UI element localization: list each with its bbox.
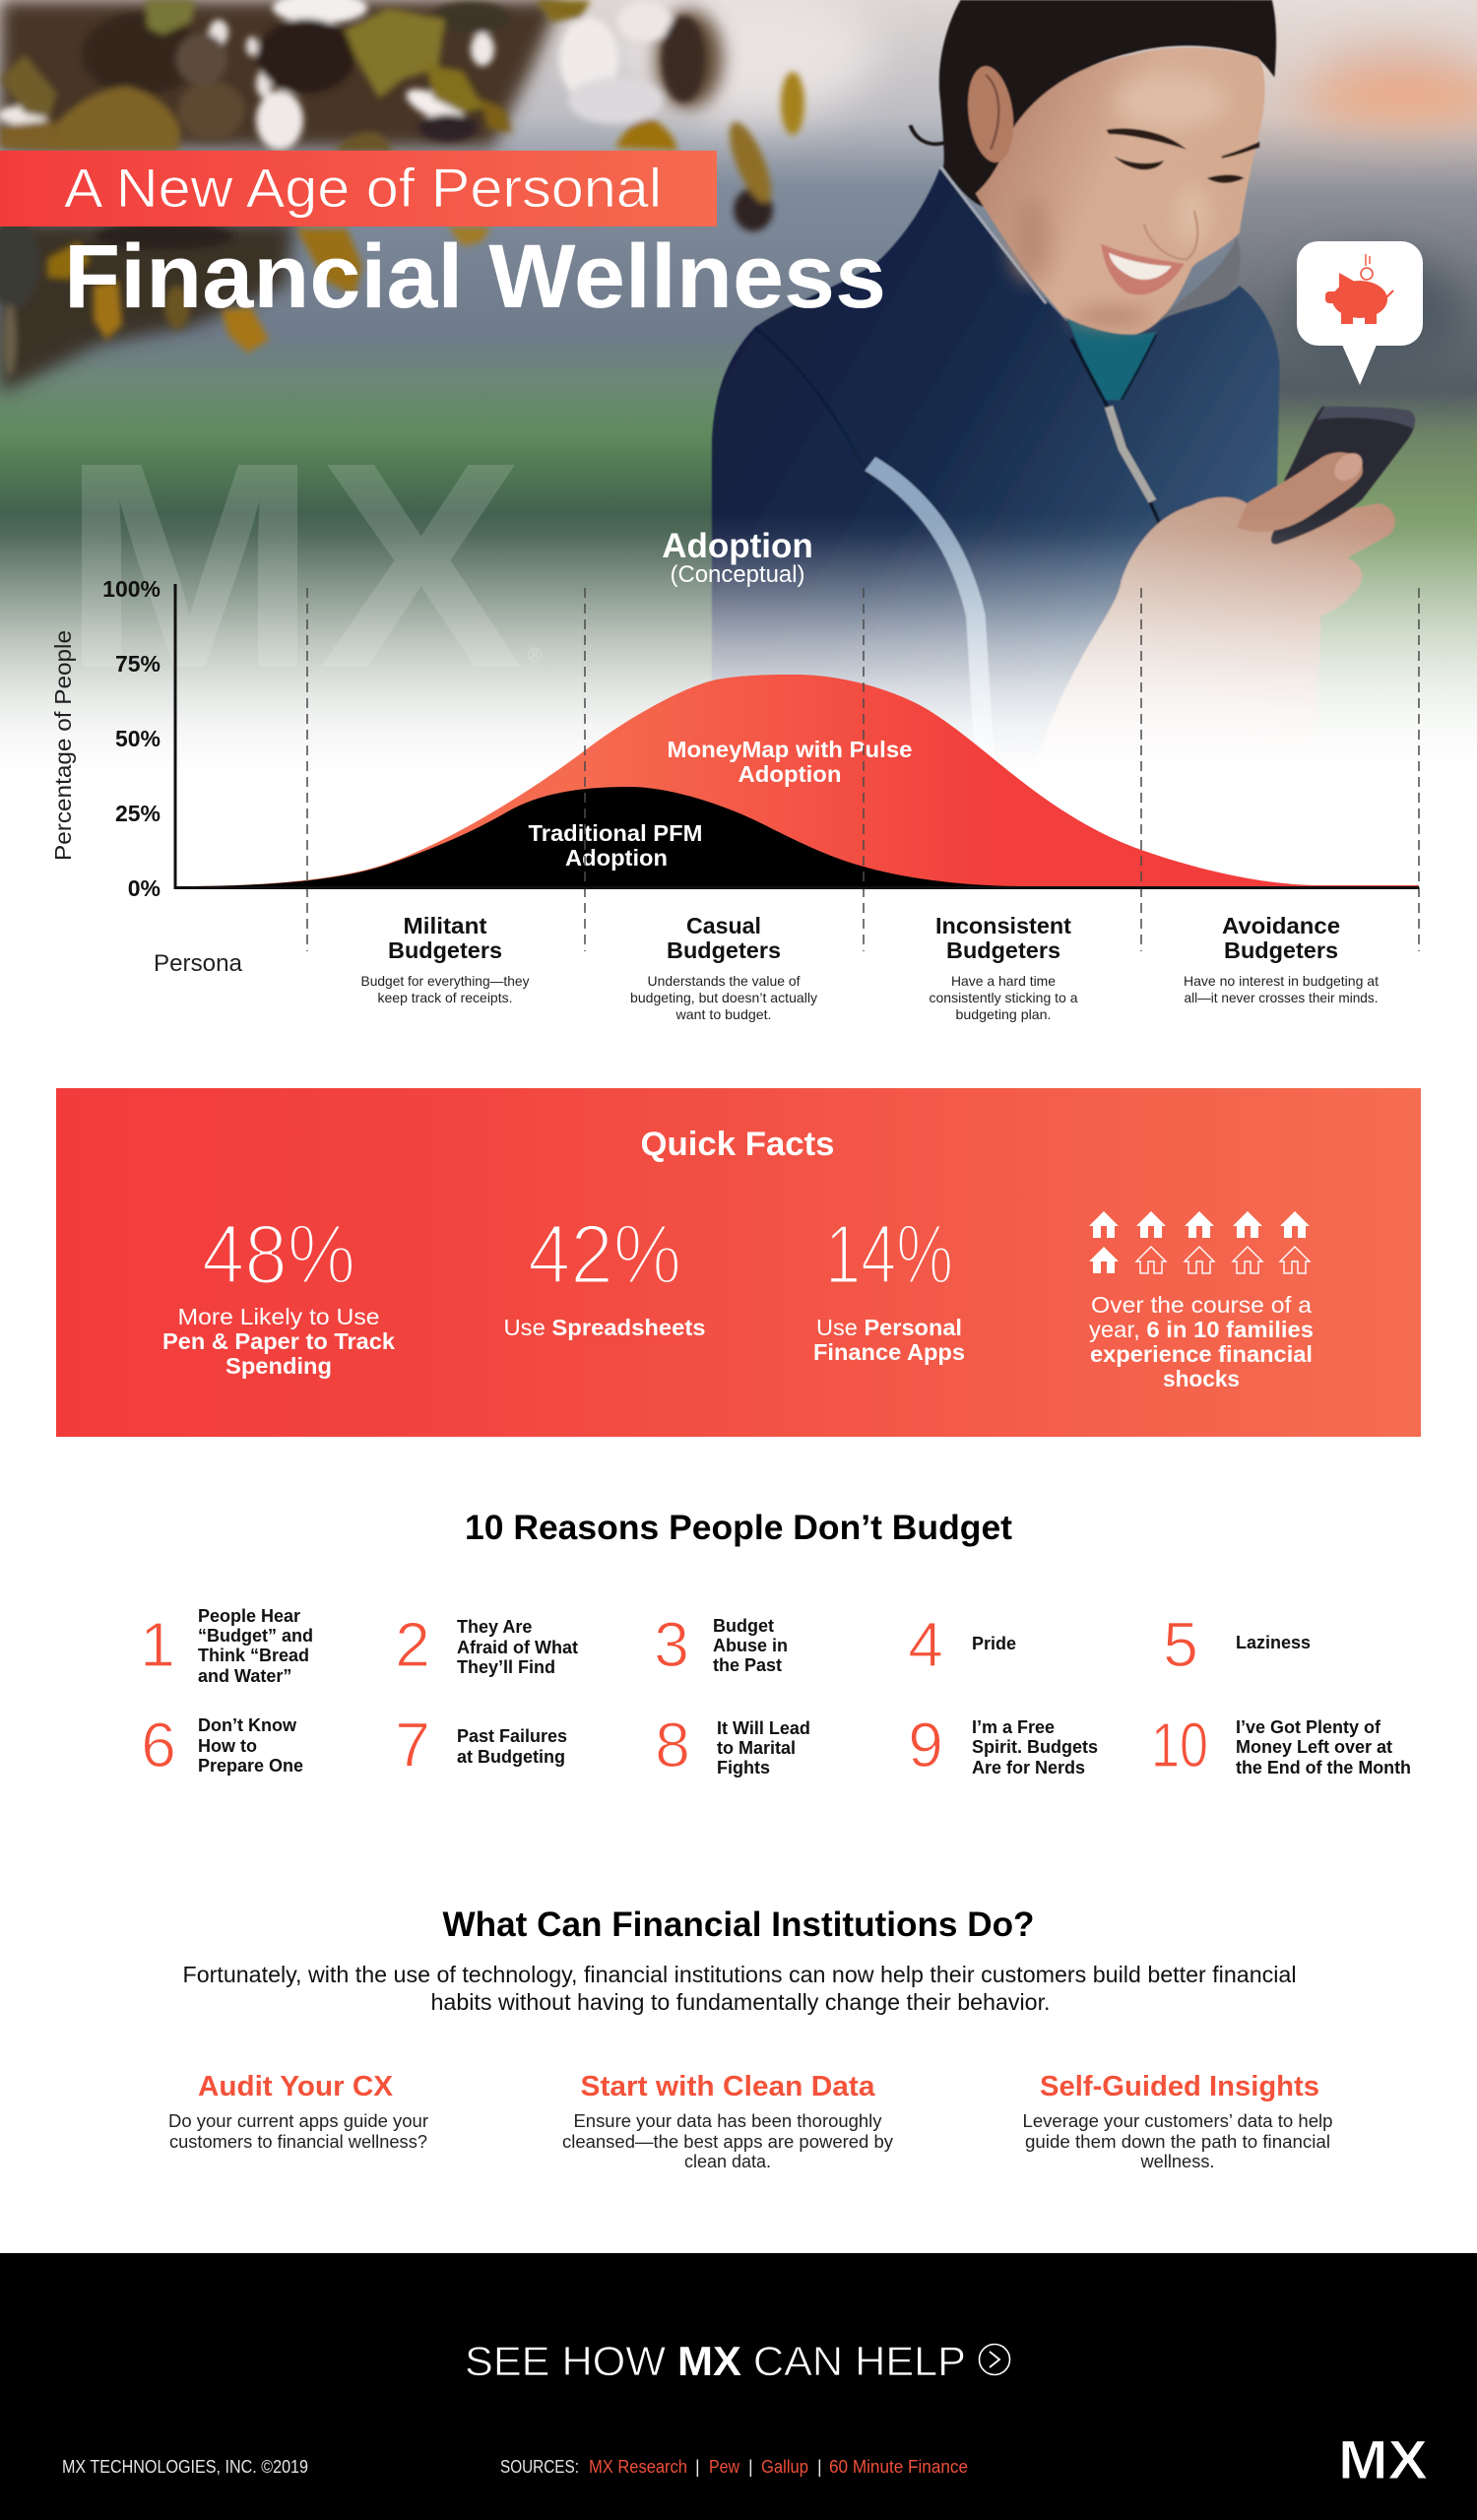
persona: inconsistent budgeters: consistently sticking to a	[930, 990, 1078, 1005]
persona: avoidance budgeters: Have no interest in budgeting at	[1184, 973, 1379, 989]
sources: 60 Minute Finance	[829, 2457, 968, 2477]
action: start with clean data: Start with Clean Data	[581, 2071, 875, 2102]
intro paragraph: Fortunately, with the use of technology, financial institutions can now help their customers build better financial	[183, 1962, 1296, 1987]
persona: avoidance budgeters: all—it never crosses their minds.	[1184, 990, 1379, 1005]
call to action: SEE HOW MX CAN HELP	[465, 2338, 966, 2384]
area: traditional PFM adoption	[175, 787, 1024, 886]
reason 1	[140, 1606, 313, 1686]
action: audit your CX	[168, 2071, 428, 2152]
intro paragraph: habits without having to fundamentally change their behavior.	[431, 1989, 1050, 2015]
stat: 14 percent personal finance apps: 14%	[825, 1208, 953, 1302]
reason 5: Laziness	[1236, 1633, 1311, 1652]
stat: financial shocks	[1089, 1292, 1314, 1391]
reason 7: at Budgeting	[457, 1747, 565, 1767]
persona: inconsistent budgeters: budgeting plan.	[955, 1006, 1052, 1022]
reason 1: Think “Bread	[198, 1646, 309, 1665]
reason 6: Prepare One	[198, 1756, 303, 1776]
persona: militant budgeters: keep track of receipts.	[378, 990, 512, 1005]
stat: 42 percent spreadsheets: 42%	[528, 1208, 681, 1302]
persona: casual budgeters: Casual	[686, 913, 761, 938]
reason 6	[141, 1710, 303, 1780]
sources: Gallup	[761, 2457, 808, 2477]
heading: quick facts: Quick Facts	[640, 1126, 835, 1163]
reason 6: Don’t Know	[198, 1715, 297, 1735]
y axis title: Percentage of People	[50, 630, 76, 861]
icon: circled chevron arrow	[979, 2344, 1010, 2375]
title banner: A New Age of Personal	[64, 157, 662, 219]
persona: inconsistent budgeters: Budgeters	[946, 937, 1060, 963]
area: MoneyMap with Pulse adoption: Adoption	[738, 761, 841, 787]
reason 8	[655, 1710, 810, 1780]
persona: inconsistent budgeters	[930, 913, 1078, 1022]
watermark: MX logo: MX	[61, 402, 526, 730]
reason 2: 2	[395, 1609, 430, 1680]
persona: avoidance budgeters: Budgeters	[1224, 937, 1338, 963]
area: traditional PFM adoption: Traditional PFM	[528, 820, 703, 846]
area: MoneyMap with Pulse adoption	[175, 675, 1419, 886]
reason 10: the End of the Month	[1236, 1758, 1411, 1777]
reason 9	[908, 1710, 1098, 1780]
reason 1: 1	[140, 1609, 175, 1680]
persona row	[154, 913, 1379, 1022]
y axis labels	[102, 576, 161, 901]
reason 10: I’ve Got Plenty of	[1236, 1717, 1381, 1737]
area: MoneyMap with Pulse adoption: MoneyMap with Pulse	[668, 737, 912, 762]
reason 2	[395, 1609, 578, 1680]
action: self-guided insights: wellness.	[1139, 2152, 1215, 2171]
sources: MX Research	[589, 2457, 687, 2477]
chart heading: Adoption	[662, 527, 813, 565]
hero photo: woman smiling at phone outdoors	[0, 0, 1477, 783]
sources: Pew	[709, 2457, 740, 2477]
action: self-guided insights	[1022, 2071, 1333, 2171]
woman figure traced in a local coordinate system	[712, 0, 1415, 778]
chart heading: (Conceptual)	[670, 561, 805, 588]
reason 10	[1151, 1710, 1411, 1780]
persona: casual budgeters	[630, 913, 817, 1022]
y axis labels: 0%	[128, 875, 161, 901]
persona: militant budgeters: Militant	[404, 913, 487, 938]
sources: |	[695, 2457, 700, 2477]
reason 9: I’m a Free	[972, 1717, 1055, 1737]
area: traditional PFM adoption: Adoption	[565, 845, 668, 871]
panel: quick facts	[56, 1088, 1421, 1437]
reason 8: 8	[655, 1710, 690, 1780]
reason 7: 7	[395, 1710, 430, 1780]
icon: ten houses, six filled	[1089, 1211, 1310, 1273]
intro paragraph	[183, 1962, 1296, 2015]
reason 3: Budget	[713, 1616, 774, 1636]
persona: militant budgeters: Budgeters	[388, 937, 502, 963]
footer panel	[0, 2253, 1477, 2520]
action: start with clean data: cleansed—the best apps are powered by	[562, 2132, 893, 2152]
area chart: adoption curves by persona	[50, 576, 1419, 951]
reason 4	[908, 1609, 1016, 1680]
persona: militant budgeters: Budget for everything—they	[360, 973, 530, 989]
reason 4: 4	[908, 1609, 943, 1680]
action: audit your CX: Do your current apps guide your	[168, 2111, 428, 2131]
reason 6: 6	[141, 1710, 176, 1780]
y axis labels: 25%	[115, 801, 161, 826]
reason 9: Are for Nerds	[972, 1758, 1085, 1777]
y axis labels: 50%	[115, 726, 161, 751]
reason 8: It Will Lead	[717, 1718, 810, 1738]
persona: casual budgeters: Understands the value of	[648, 973, 801, 989]
stat: 48 percent pen and paper: More Likely to Use	[177, 1304, 380, 1329]
reason 1: “Budget” and	[198, 1626, 313, 1646]
reason 1: People Hear	[198, 1606, 300, 1626]
sources: SOURCES:	[500, 2457, 579, 2477]
reason 5: 5	[1163, 1609, 1198, 1680]
reason 9: 9	[908, 1710, 943, 1780]
title: Financial Wellness: Financial Wellness	[64, 226, 886, 327]
stat: financial shocks: Over the course of a	[1091, 1292, 1313, 1318]
persona: avoidance budgeters	[1184, 913, 1379, 1005]
reason 3	[654, 1609, 788, 1680]
persona: casual budgeters: want to budget.	[674, 1006, 772, 1022]
title banner	[0, 151, 717, 226]
reason 7: Past Failures	[457, 1726, 567, 1746]
stat: financial shocks: year, 6 in 10 families	[1089, 1317, 1314, 1342]
reason 1: and Water”	[198, 1666, 291, 1686]
action: self-guided insights: Self-Guided Insights	[1040, 2071, 1319, 2102]
persona axis label: Persona	[154, 950, 243, 977]
persona: casual budgeters: Budgeters	[667, 937, 781, 963]
persona: inconsistent budgeters: Inconsistent	[935, 913, 1071, 938]
stat: 48 percent pen and paper: 48%	[202, 1208, 355, 1302]
heading: 10 reasons: 10 Reasons People Don’t Budget	[465, 1508, 1012, 1547]
stat: 42 percent spreadsheets: Use Spreadsheets	[504, 1315, 705, 1340]
icon: piggy bank speech bubble	[1297, 241, 1423, 385]
action: self-guided insights: guide them down the path to financial	[1025, 2132, 1330, 2152]
reason 2: They Are	[457, 1617, 532, 1637]
reason 8: Fights	[717, 1758, 770, 1777]
stat: 48 percent pen and paper: Spending	[225, 1353, 332, 1379]
persona: inconsistent budgeters: Have a hard time	[951, 973, 1056, 989]
reason 3: 3	[654, 1609, 689, 1680]
action: audit your CX: customers to financial wellness?	[169, 2132, 427, 2152]
action: self-guided insights: Leverage your customers’ data to help	[1022, 2111, 1333, 2131]
sources: |	[748, 2457, 753, 2477]
stat: 42 percent spreadsheets	[504, 1208, 705, 1340]
stat: 14 percent personal finance apps	[813, 1208, 965, 1365]
reasons list	[140, 1606, 1411, 1780]
reason 3: the Past	[713, 1655, 782, 1675]
y axis labels: 100%	[102, 576, 161, 602]
reason 7	[395, 1710, 567, 1780]
reason 8: to Marital	[717, 1738, 796, 1758]
stat: financial shocks: experience financial	[1090, 1341, 1313, 1367]
action: start with clean data	[562, 2071, 893, 2171]
heading: what can financial institutions do: What Can Financial Institutions Do?	[443, 1906, 1034, 1944]
reason 2: Afraid of What	[457, 1638, 578, 1657]
sources	[500, 2457, 968, 2477]
stat: 14 percent personal finance apps: Finance Apps	[813, 1339, 965, 1365]
persona: casual budgeters: budgeting, but doesn’t actually	[630, 990, 817, 1005]
stat: financial shocks: shocks	[1163, 1366, 1240, 1391]
reason 6: How to	[198, 1736, 257, 1756]
stat: 48 percent pen and paper: Pen & Paper to Track	[162, 1328, 396, 1354]
persona: avoidance budgeters: Avoidance	[1222, 913, 1340, 938]
y axis labels: 75%	[115, 651, 161, 677]
chart heading	[662, 527, 813, 588]
action: audit your CX: Audit Your CX	[198, 2071, 394, 2102]
reason 9: Spirit. Budgets	[972, 1737, 1098, 1757]
action: start with clean data: clean data.	[684, 2152, 771, 2171]
reason 5	[1163, 1609, 1311, 1680]
stat: 48 percent pen and paper	[162, 1208, 396, 1379]
action: start with clean data: Ensure your data has been thoroughly	[573, 2111, 882, 2131]
logo: MX: MX	[1338, 2428, 1428, 2490]
copyright: MX TECHNOLOGIES, INC. ©2019	[62, 2457, 308, 2477]
persona: militant budgeters	[360, 913, 530, 1005]
watermark: MX logo: ®	[528, 645, 543, 667]
sources: |	[817, 2457, 822, 2477]
stat: 14 percent personal finance apps: Use Personal	[816, 1315, 962, 1340]
reason 10: Money Left over at	[1236, 1737, 1392, 1757]
reason 4: Pride	[972, 1634, 1016, 1653]
reason 3: Abuse in	[713, 1636, 788, 1655]
reason 10: 10	[1151, 1710, 1208, 1780]
reason 2: They’ll Find	[457, 1657, 555, 1677]
